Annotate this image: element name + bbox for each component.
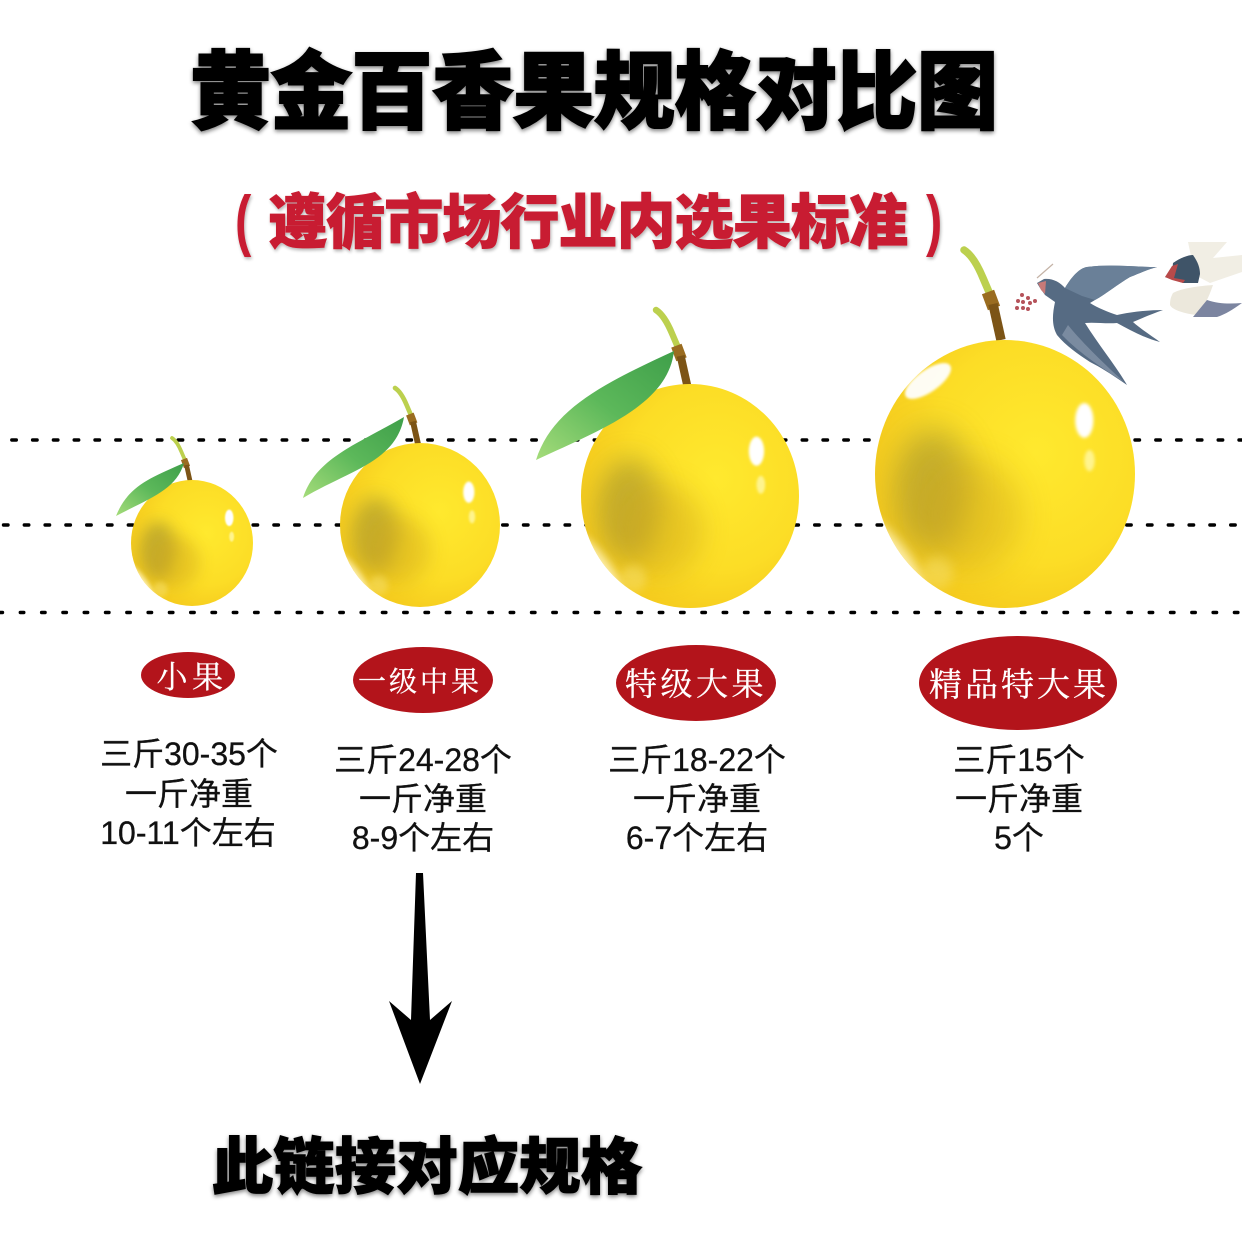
fruit: premium large bbox=[536, 310, 799, 608]
text block: grade one medium spec: 一斤净重 bbox=[359, 781, 487, 817]
subtitle: 遵循市场行业内选果标准 bbox=[268, 190, 908, 256]
text block: premium large spec: 6-7个左右 bbox=[626, 820, 768, 856]
fruit: small bbox=[116, 438, 253, 606]
label: premium large fruit: 特级大果 bbox=[625, 666, 767, 702]
text block: extra large spec: 三斤15个 bbox=[953, 742, 1085, 778]
arrow pointing down bbox=[389, 873, 452, 1084]
text block: small fruit spec: 10-11个左右 bbox=[100, 815, 276, 851]
text block: premium large spec: 三斤18-22个 bbox=[608, 742, 786, 778]
label: small fruit: 小果 bbox=[156, 660, 228, 695]
fruit: extra large bbox=[859, 250, 1135, 608]
text block: extra large spec: 一斤净重 bbox=[955, 781, 1083, 817]
text block: grade one medium spec: 三斤24-28个 bbox=[334, 742, 512, 778]
label: small fruit bbox=[141, 652, 235, 698]
label: grade one medium fruit bbox=[353, 647, 493, 713]
text block: small fruit spec: 三斤30-35个 bbox=[100, 736, 278, 772]
dotted guide lines bbox=[0, 440, 1242, 612]
text block: grade one medium spec bbox=[334, 742, 512, 856]
text block: premium large spec: 一斤净重 bbox=[633, 781, 761, 817]
subtitle: ( bbox=[235, 181, 252, 258]
text block: extra large spec bbox=[953, 742, 1085, 856]
link caption: 此链接对应规格 bbox=[212, 1133, 642, 1201]
subtitle: ) bbox=[926, 181, 942, 258]
icon: swallow carrying berries bbox=[1015, 264, 1163, 385]
fruit: grade one medium bbox=[303, 388, 500, 607]
text block: premium large spec bbox=[608, 742, 786, 856]
text block: small fruit spec: 一斤净重 bbox=[125, 776, 253, 812]
text block: small fruit spec bbox=[100, 736, 278, 851]
text block: extra large spec: 5个 bbox=[994, 820, 1044, 856]
label: extra large fruit: 精品特大果 bbox=[929, 667, 1109, 704]
label: extra large fruit bbox=[919, 636, 1117, 730]
label: grade one medium fruit: 一级中果 bbox=[358, 666, 482, 698]
label: premium large fruit bbox=[616, 645, 776, 721]
text block: grade one medium spec: 8-9个左右 bbox=[352, 820, 494, 856]
title: 黄金百香果规格对比图 bbox=[190, 45, 998, 140]
icon: second swallow bbox=[1165, 242, 1242, 317]
